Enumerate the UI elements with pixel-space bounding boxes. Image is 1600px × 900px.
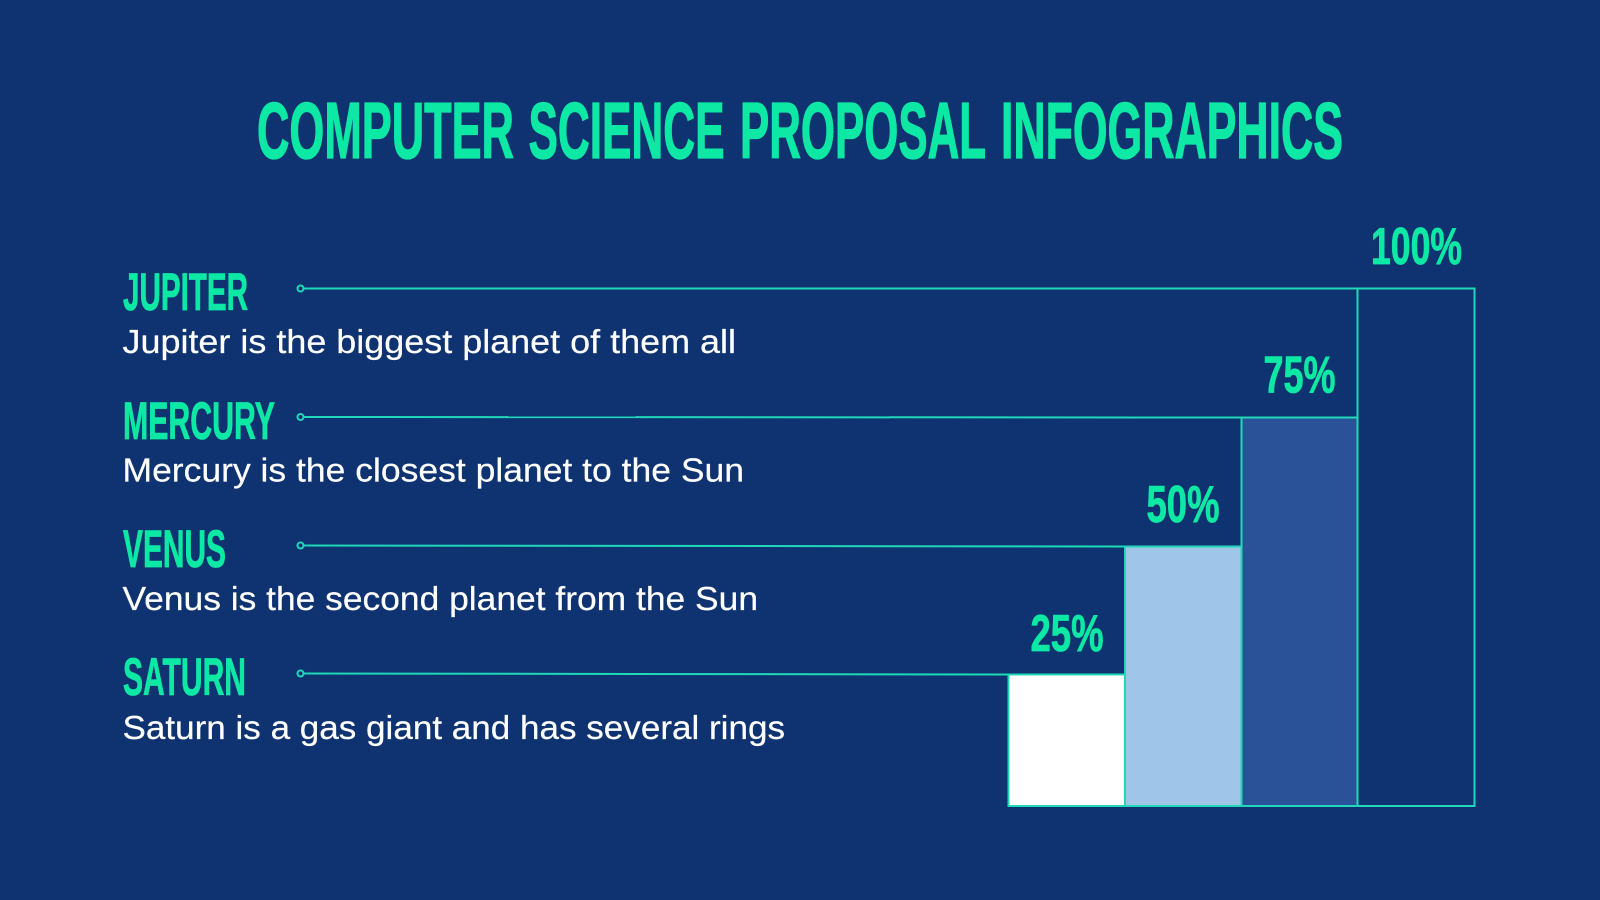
bar: 50% xyxy=(1125,546,1242,806)
heading: Saturn: SATURN xyxy=(123,648,246,707)
title: SCIENCE xyxy=(528,86,724,175)
description: Saturn: Saturn is a gas giant and has several rings xyxy=(122,710,785,747)
row: Venus xyxy=(122,520,1125,618)
value: 25%: 25% xyxy=(1030,605,1104,663)
title xyxy=(257,86,1343,175)
leader line: Mercury xyxy=(298,414,1241,420)
value: 75%: 75% xyxy=(1264,346,1336,404)
description: Venus: Venus is the second planet from the Sun xyxy=(122,581,758,618)
bar: 75% xyxy=(1242,418,1358,806)
row: Mercury xyxy=(122,392,1241,490)
heading: Jupiter: JUPITER xyxy=(123,263,248,322)
row: Saturn xyxy=(122,648,1008,747)
row: Jupiter xyxy=(122,263,1357,361)
title: PROPOSAL xyxy=(740,86,986,175)
leader line: Saturn xyxy=(298,670,1008,676)
bar: 25% xyxy=(1008,674,1125,806)
heading: Mercury: MERCURY xyxy=(123,392,275,451)
value: 100%: 100% xyxy=(1371,218,1462,276)
description: Jupiter: Jupiter is the biggest planet of them all xyxy=(122,324,736,361)
leader line: Jupiter xyxy=(298,286,1357,292)
title: INFOGRAPHICS xyxy=(1001,86,1343,175)
value: 50%: 50% xyxy=(1146,476,1220,534)
leader line: Venus xyxy=(298,542,1125,548)
bar: 100% xyxy=(1358,288,1474,806)
bar chart xyxy=(1008,218,1474,806)
description: Mercury: Mercury is the closest planet to the Sun xyxy=(122,452,744,490)
heading: Venus: VENUS xyxy=(123,520,226,579)
title: COMPUTER xyxy=(257,86,514,175)
